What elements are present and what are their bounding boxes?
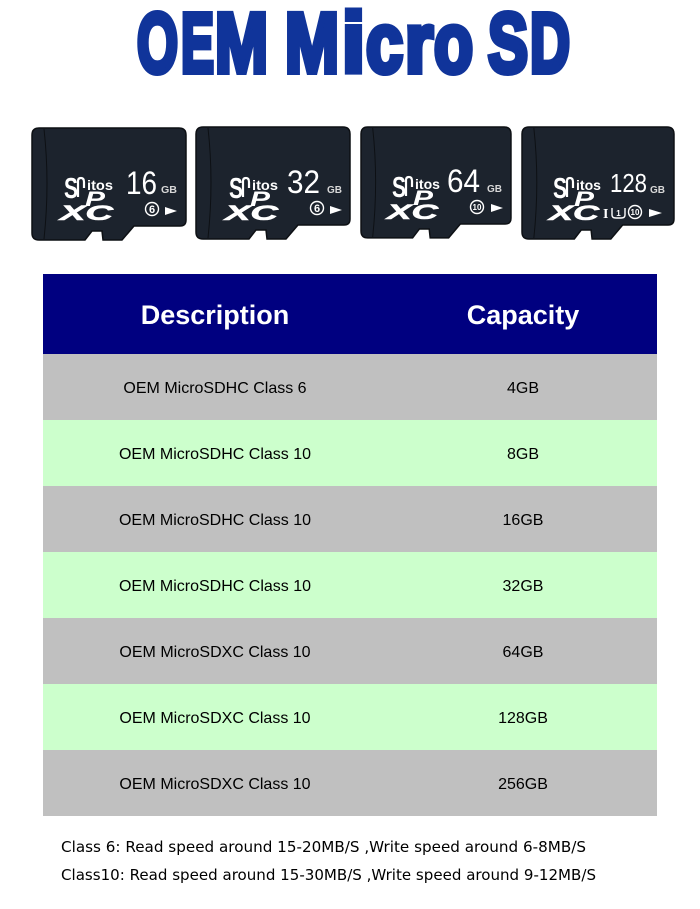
- note: class 6: Class 6: Read speed around 15-20MB/S ,Write speed around 6-8MB/S: [61, 838, 586, 856]
- card: 32GB: 6: [314, 203, 320, 215]
- card: 32GB: 32: [287, 164, 320, 200]
- card: 64GB: XC: [385, 201, 439, 224]
- card: 64GB: [361, 127, 511, 238]
- card: 128GB: itos: [576, 177, 601, 193]
- note: class 10: Class10: Read speed around 15-30MB/S ,Write speed around 9-12MB/S: [61, 866, 596, 884]
- card: 16GB: itos: [87, 177, 113, 193]
- table: [43, 274, 657, 816]
- title: [137, 0, 570, 90]
- row: 64GB: OEM MicroSDXC Class 10: [119, 644, 311, 661]
- table header: Capacity: [467, 300, 579, 330]
- row: 4GB: 4GB: [507, 380, 539, 397]
- card: 128GB: S: [553, 173, 567, 205]
- card: 64GB: itos: [415, 176, 440, 192]
- table header: Description: [141, 300, 289, 330]
- card: 32GB: [196, 127, 350, 239]
- card: 64GB: S: [392, 172, 406, 204]
- row: 4GB: [43, 354, 657, 420]
- card: 128GB: P: [574, 188, 595, 211]
- card: 128GB: XC: [547, 202, 600, 225]
- row: 256GB: [43, 750, 657, 816]
- row: 32GB: 32GB: [503, 578, 543, 595]
- row: 16GB: 16GB: [503, 512, 543, 529]
- row: 8GB: OEM MicroSDHC Class 10: [119, 446, 311, 463]
- card: 32GB: itos: [252, 177, 278, 193]
- row: 8GB: [43, 420, 657, 486]
- card: 128GB: [522, 127, 674, 239]
- card: 16GB: [32, 128, 186, 240]
- table header: [43, 274, 657, 354]
- row: 64GB: 64GB: [503, 644, 543, 661]
- card: 16GB: 16: [126, 165, 157, 201]
- product photos: memory cards: [32, 127, 674, 240]
- row: 256GB: 256GB: [498, 776, 548, 793]
- row: 128GB: [43, 684, 657, 750]
- row: 16GB: OEM MicroSDHC Class 10: [119, 512, 311, 529]
- card: 16GB: S: [64, 173, 78, 205]
- card: 128GB: 10: [631, 208, 640, 217]
- row: 64GB: [43, 618, 657, 684]
- row: 4GB: OEM MicroSDHC Class 6: [123, 380, 307, 397]
- card: 32GB: P: [250, 188, 271, 211]
- row: 16GB: [43, 486, 657, 552]
- row: 32GB: OEM MicroSDHC Class 10: [119, 578, 311, 595]
- row: 128GB: 128GB: [498, 710, 548, 727]
- row: 32GB: [43, 552, 657, 618]
- card: 64GB: GB: [487, 184, 502, 195]
- speed notes: [61, 838, 596, 884]
- card: 128GB: GB: [650, 185, 665, 196]
- card: 128GB: 128: [610, 168, 647, 198]
- card: 32GB: XC: [223, 202, 279, 225]
- row: 128GB: OEM MicroSDXC Class 10: [119, 710, 311, 727]
- card: 64GB: 64: [447, 163, 480, 199]
- card: 16GB: GB: [161, 185, 177, 196]
- card: 32GB: S: [229, 173, 243, 205]
- card: 128GB: I: [603, 207, 608, 222]
- card: 32GB: GB: [327, 185, 342, 196]
- card: 16GB: XC: [58, 202, 114, 225]
- card: 16GB: 6: [149, 204, 155, 216]
- card: 16GB: P: [85, 188, 106, 211]
- card: 64GB: 10: [473, 203, 482, 212]
- card: 64GB: P: [413, 187, 434, 210]
- row: 8GB: 8GB: [507, 446, 539, 463]
- row: 256GB: OEM MicroSDXC Class 10: [119, 776, 311, 793]
- card: 128GB: 1: [616, 209, 621, 218]
